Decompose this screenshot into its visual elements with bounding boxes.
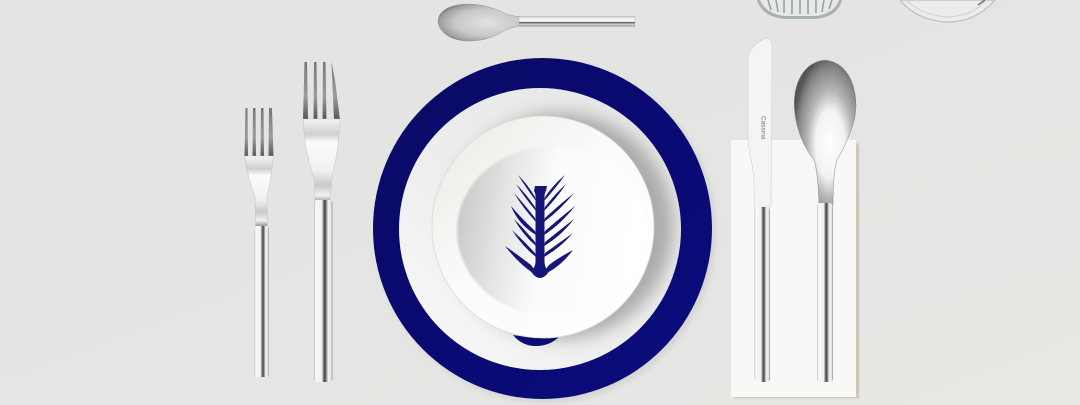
bowl shadow on charger xyxy=(447,113,673,339)
plate: white charger centre xyxy=(399,88,681,370)
large fork tines xyxy=(303,62,340,120)
large dinner fork xyxy=(303,62,340,382)
knife brand engraving: Cassina xyxy=(760,116,766,140)
wine glass base, top right xyxy=(900,0,995,22)
large fork handle xyxy=(314,200,332,382)
napkin under knife and spoon xyxy=(731,140,859,399)
small fork tines xyxy=(244,108,274,157)
dessert spoon, top centre xyxy=(438,4,635,41)
table setting illustration xyxy=(244,0,996,402)
deep soup bowl xyxy=(432,116,654,338)
glass tumbler, top right xyxy=(757,0,842,19)
soft plate shadow xyxy=(376,61,716,403)
knife handle xyxy=(754,207,770,382)
small fork head xyxy=(244,156,274,226)
dinner spoon xyxy=(794,60,856,382)
small salad fork xyxy=(244,108,274,377)
bowl inner well xyxy=(457,146,647,316)
small fork handle xyxy=(254,226,269,377)
bottom motif peeking under the bowl xyxy=(513,335,560,346)
dinner knife xyxy=(748,39,772,382)
bowl fishbone motif xyxy=(505,175,575,278)
spoon handle xyxy=(817,203,833,382)
large fork head xyxy=(303,119,340,202)
plate: blue-rimmed charger xyxy=(373,58,712,399)
